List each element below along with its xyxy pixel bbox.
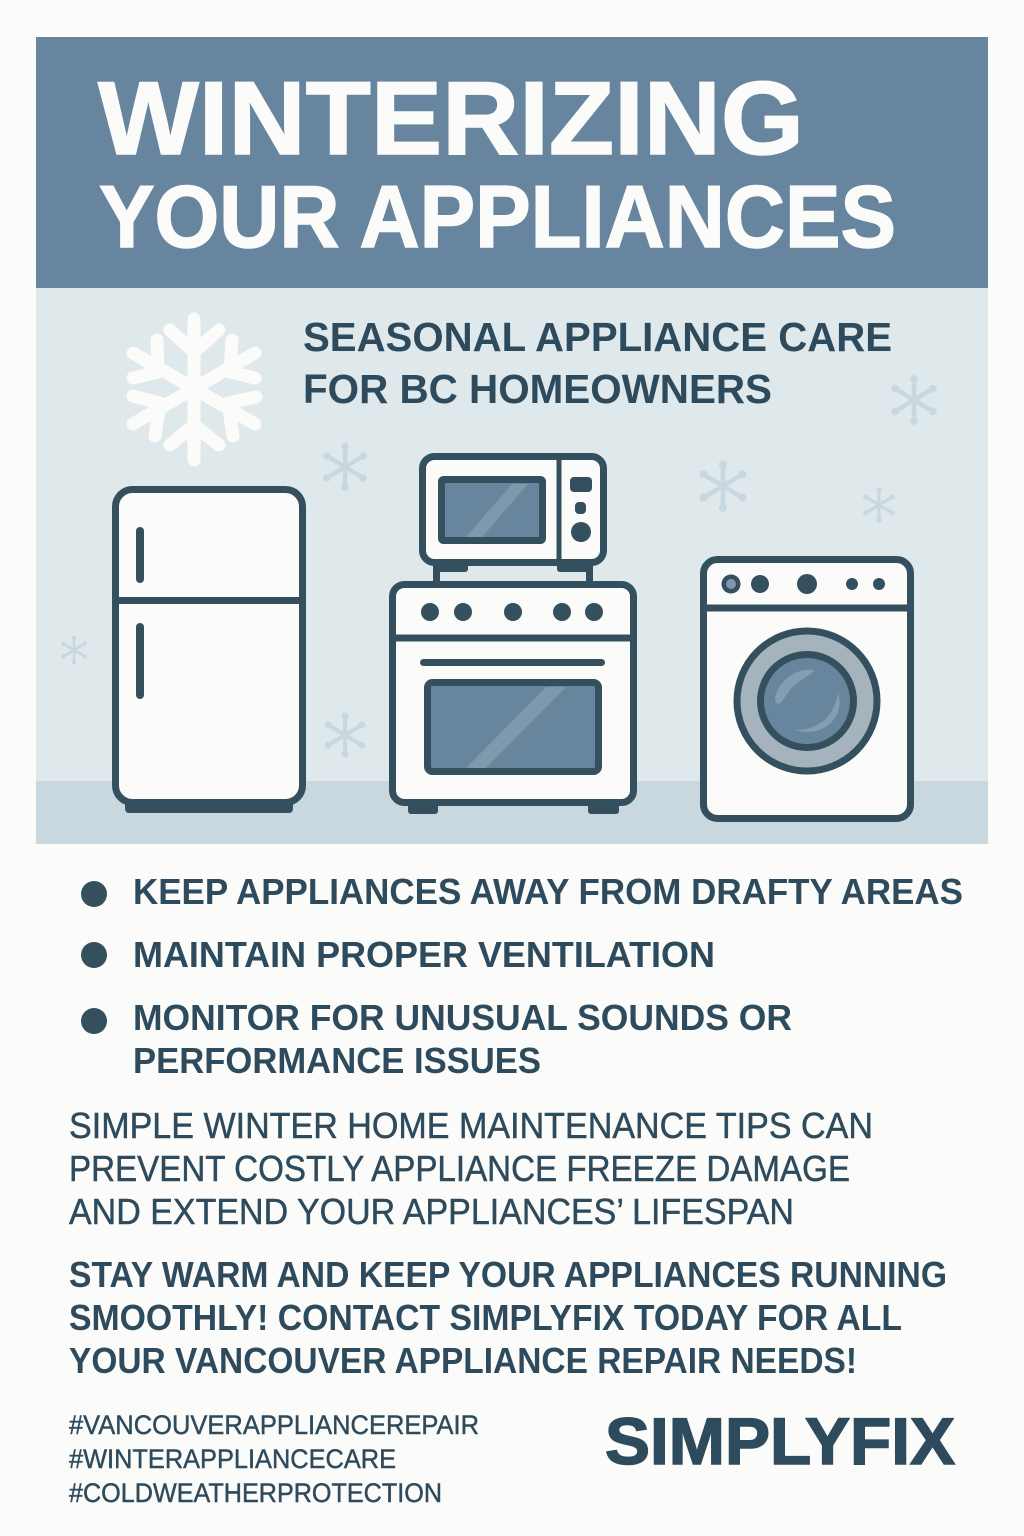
panel: title banner bbox=[36, 37, 988, 288]
title: YOUR APPLIANCES bbox=[99, 167, 896, 266]
bullet list: MAINTAIN PROPER VENTILATION bbox=[133, 934, 715, 975]
text block: maintenance tips: PREVENT COSTLY APPLIANCE FREEZE DAMAGE bbox=[69, 1148, 850, 1189]
bullet list bbox=[81, 871, 963, 1081]
icon: microwave bbox=[422, 456, 604, 584]
text block: call to action bbox=[69, 1254, 947, 1381]
hashtags bbox=[69, 1410, 479, 1508]
bullet list: MONITOR FOR UNUSUAL SOUNDS OR bbox=[133, 997, 792, 1038]
bullet list: PERFORMANCE ISSUES bbox=[133, 1040, 541, 1081]
icon: small snowflakes bbox=[61, 375, 937, 757]
icon: refrigerator bbox=[116, 490, 302, 813]
drum bbox=[737, 631, 877, 771]
subtitle: FOR BC HOMEOWNERS bbox=[303, 366, 772, 412]
text block: call to action: YOUR VANCOUVER APPLIANCE REPAIR NEEDS! bbox=[69, 1340, 857, 1381]
title: WINTERIZING bbox=[98, 61, 804, 177]
panel: appliance illustration bbox=[36, 288, 988, 844]
icon: large snowflake bbox=[133, 319, 256, 460]
hashtags: #VANCOUVERAPPLIANCEREPAIR bbox=[69, 1410, 479, 1440]
subtitle: SEASONAL APPLIANCE CARE bbox=[303, 314, 892, 360]
hashtags: #WINTERAPPLIANCECARE bbox=[69, 1444, 396, 1474]
icon: oven bbox=[392, 584, 634, 814]
hashtags: #COLDWEATHERPROTECTION bbox=[69, 1478, 442, 1508]
logo wordmark: SIMPLYFIX bbox=[605, 1404, 955, 1478]
text block: call to action: SMOOTHLY! CONTACT SIMPLYFIX TODAY FOR ALL bbox=[69, 1297, 902, 1338]
subtitle bbox=[303, 314, 892, 412]
title bbox=[98, 61, 896, 266]
text block: maintenance tips: SIMPLE WINTER HOME MAINTENANCE TIPS CAN bbox=[69, 1105, 873, 1146]
text block: maintenance tips: AND EXTEND YOUR APPLIANCES’ LIFESPAN bbox=[69, 1191, 794, 1232]
text block: maintenance tips bbox=[69, 1105, 873, 1232]
icon: washing machine bbox=[704, 560, 910, 818]
bullet list: KEEP APPLIANCES AWAY FROM DRAFTY AREAS bbox=[133, 871, 963, 912]
text block: call to action: STAY WARM AND KEEP YOUR APPLIANCES RUNNING bbox=[69, 1254, 947, 1295]
